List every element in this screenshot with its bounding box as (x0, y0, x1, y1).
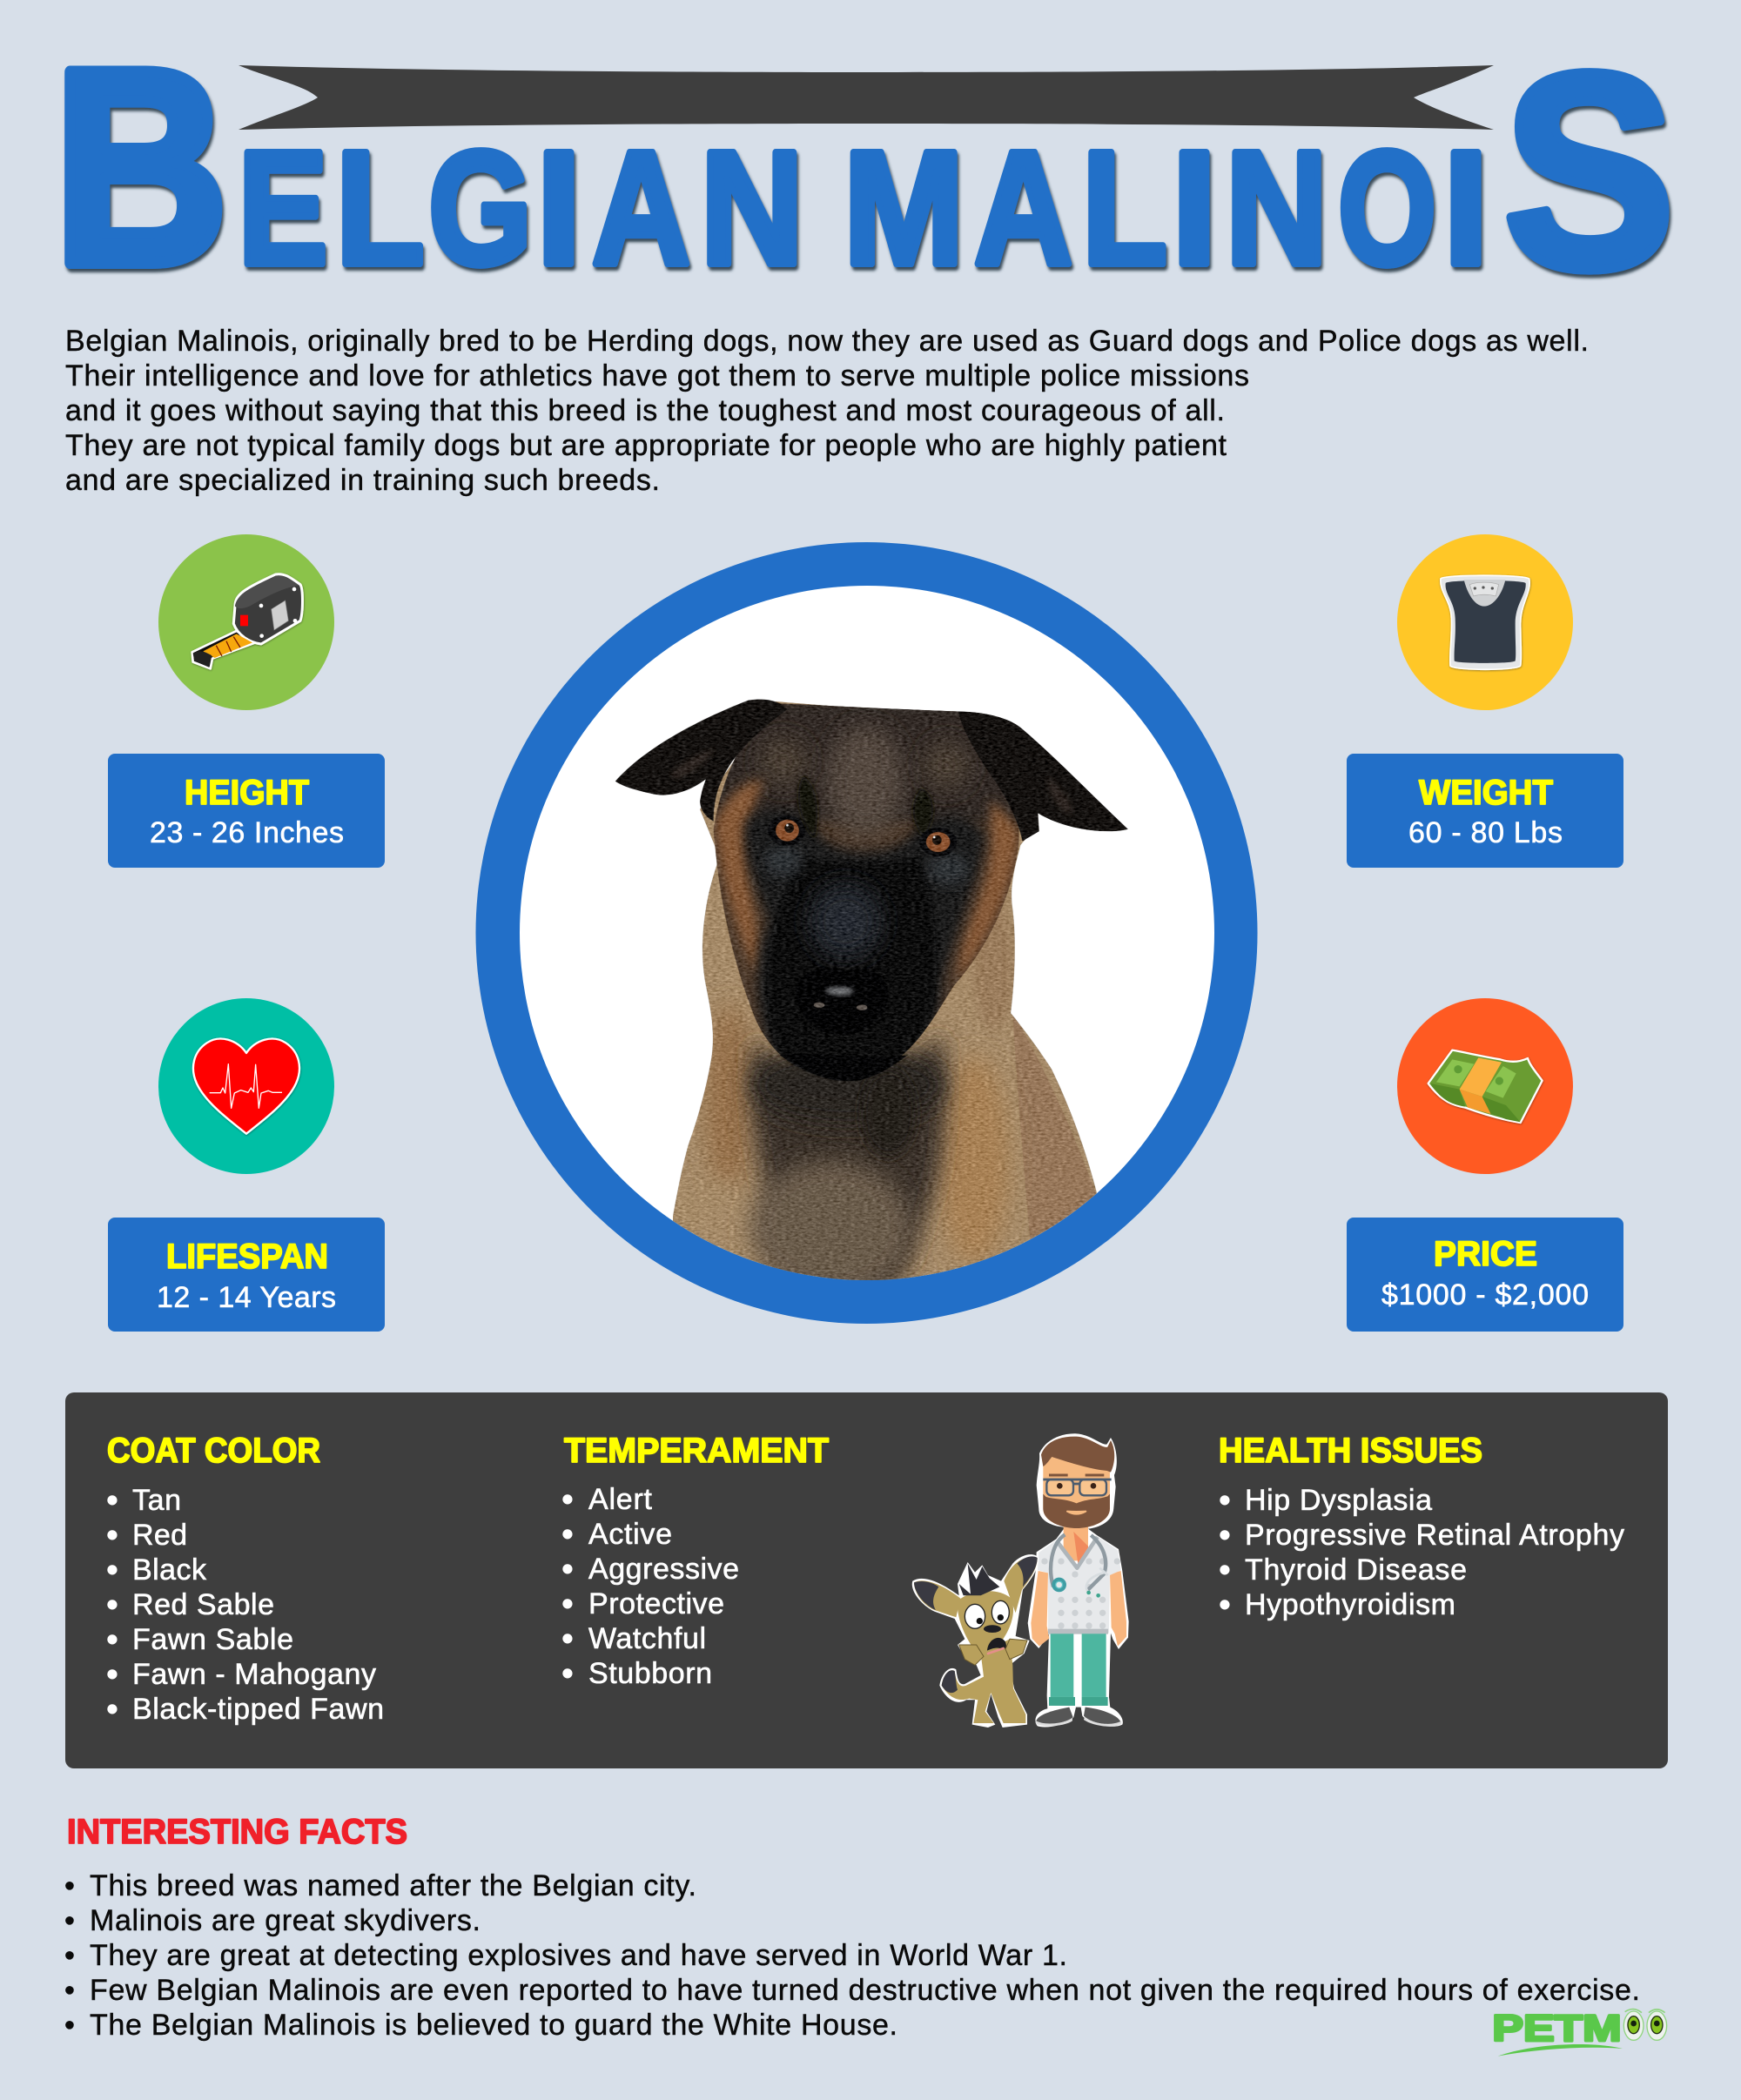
illustration: vet and cartoon dog (912, 1433, 1129, 1728)
banner ribbon (239, 65, 1494, 130)
coat color list: Red (132, 1519, 187, 1552)
card: lifespan: 12 - 14 Years (157, 1281, 336, 1314)
health issues list: • (1220, 1519, 1230, 1552)
head (714, 703, 1019, 1077)
coat color list: Tan (132, 1484, 181, 1517)
temperament list: Alert (588, 1483, 653, 1516)
interesting facts list: • (64, 1939, 75, 1972)
coat color list: Fawn Sable (132, 1623, 293, 1656)
coat color list: • (107, 1623, 118, 1656)
title: L (336, 118, 425, 299)
nose (795, 968, 889, 1035)
card: weight: 60 - 80 Lbs (1408, 816, 1563, 849)
temperament list: • (562, 1553, 573, 1586)
interesting facts list: • (64, 2009, 75, 2042)
temperament list (562, 1432, 829, 1690)
card: weight (1347, 754, 1623, 868)
temperament list: • (562, 1483, 573, 1516)
card: height (108, 754, 385, 868)
health issues list: • (1220, 1588, 1230, 1621)
dog photo (615, 699, 1128, 1280)
title: L (1082, 118, 1167, 299)
interesting facts list: • (64, 1904, 75, 1937)
health issues list (1219, 1432, 1624, 1621)
coat color list: • (107, 1693, 118, 1726)
icon: money (1397, 998, 1573, 1174)
interesting facts list: This breed was named after the Belgian city. (90, 1869, 696, 1902)
icon: weighing scale (1397, 534, 1573, 710)
temperament list: • (562, 1657, 573, 1690)
card: lifespan (108, 1218, 385, 1332)
right eye (919, 828, 957, 856)
interesting facts list: Malinois are great skydivers. (90, 1904, 481, 1937)
vet figure (1028, 1433, 1129, 1728)
card: height: 23 - 26 Inches (150, 816, 344, 849)
black mask outer (744, 808, 985, 1083)
coat color list: Black-tipped Fawn (132, 1693, 384, 1726)
health issues list: Hypothyroidism (1245, 1588, 1455, 1621)
icon: heart (158, 998, 334, 1174)
coat color list: COAT COLOR (107, 1432, 320, 1470)
intro text: They are not typical family dogs but are appropriate for people who are highly patient (65, 429, 1227, 462)
interesting facts list: Few Belgian Malinois are even reported to have turned destructive when not given the required hours of exercise. (90, 1974, 1640, 2007)
temperament list: • (562, 1587, 573, 1620)
icon: tape measure (158, 534, 334, 710)
title: A (974, 118, 1072, 299)
temperament list: Aggressive (588, 1553, 739, 1586)
title: M (844, 118, 964, 299)
neck and body fur (673, 701, 1097, 1279)
temperament list: • (562, 1622, 573, 1655)
title: N (701, 118, 803, 299)
forehead (714, 701, 1025, 822)
health issues list: • (1220, 1484, 1230, 1517)
intro text: Their intelligence and love for athletics have got them to serve multiple police missions (65, 359, 1249, 392)
coat color list (107, 1432, 384, 1726)
cheeks (716, 781, 764, 977)
title: E (239, 118, 327, 299)
intro text (65, 325, 1589, 497)
coat color list: • (107, 1519, 118, 1552)
card: height: HEIGHT (185, 774, 309, 812)
right ear (958, 711, 1128, 842)
coat color list: • (107, 1553, 118, 1587)
temperament list: TEMPERAMENT (564, 1432, 829, 1470)
interesting facts list: The Belgian Malinois is believed to guard the White House. (90, 2009, 897, 2042)
intro text: and it goes without saying that this breed is the toughest and most courageous of all. (65, 394, 1225, 427)
card: price: $1000 - $2,000 (1381, 1278, 1589, 1312)
muzzle (767, 857, 936, 1077)
coat color list: • (107, 1658, 118, 1691)
title: I (1172, 118, 1217, 299)
title: O (1338, 118, 1436, 299)
brows (798, 775, 933, 839)
title: S (1503, 15, 1675, 326)
card: lifespan: LIFESPAN (166, 1238, 328, 1276)
health issues list: HEALTH ISSUES (1219, 1432, 1482, 1470)
left ear (615, 700, 787, 822)
coat color list: Red Sable (132, 1588, 274, 1621)
coat color list: • (107, 1588, 118, 1621)
interesting facts list: They are great at detecting explosives and have served in World War 1. (90, 1939, 1067, 1972)
title (54, 11, 1675, 326)
health issues list: Progressive Retinal Atrophy (1245, 1519, 1624, 1552)
logo: PETMOO: PETM (1492, 2008, 1622, 2050)
interesting facts list: • (64, 1974, 75, 2007)
health issues list: Hip Dysplasia (1245, 1484, 1432, 1517)
title: I (536, 118, 581, 299)
left eye (768, 815, 805, 846)
card: weight: WEIGHT (1419, 774, 1553, 812)
chest dark patch (751, 1033, 944, 1301)
card: price: PRICE (1434, 1235, 1537, 1273)
mouth (780, 1054, 908, 1081)
temperament list: Active (588, 1518, 672, 1551)
coat color list: • (107, 1484, 118, 1517)
interesting facts list: • (64, 1869, 75, 1902)
temperament list: • (562, 1518, 573, 1551)
card: price (1347, 1218, 1623, 1332)
panel: dark details (65, 1392, 1668, 1768)
title: I (1443, 118, 1489, 299)
temperament list: Protective (588, 1587, 724, 1620)
central portrait ring (475, 542, 1257, 1324)
intro text: and are specialized in training such breeds. (65, 464, 660, 497)
title: N (1226, 118, 1328, 299)
title: G (428, 118, 532, 299)
title: B (54, 11, 228, 322)
coat color list: Black (132, 1553, 207, 1587)
title: A (592, 118, 690, 299)
temperament list: Watchful (588, 1622, 706, 1655)
intro text: Belgian Malinois, originally bred to be Herding dogs, now they are used as Guard dogs and Police dogs as well. (65, 325, 1589, 358)
health issues list: Thyroid Disease (1245, 1553, 1467, 1587)
interesting facts list (64, 1869, 1640, 2042)
temperament list: Stubborn (588, 1657, 712, 1690)
interesting facts heading: INTERESTING FACTS (67, 1813, 407, 1851)
health issues list: • (1220, 1553, 1230, 1587)
coat color list: Fawn - Mahogany (132, 1658, 376, 1691)
cartoon dog (912, 1554, 1039, 1728)
logo: PETMOO (1492, 2008, 1667, 2056)
eye area sheen (764, 845, 803, 877)
